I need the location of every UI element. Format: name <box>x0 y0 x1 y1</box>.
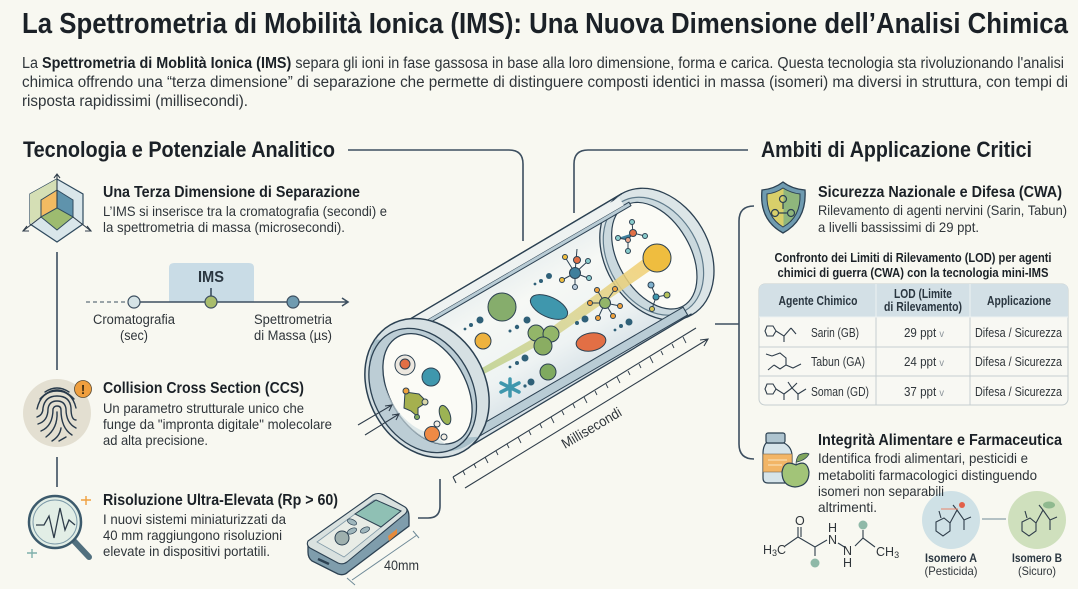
bracket connector <box>715 206 754 459</box>
dimension: 40mm <box>347 531 419 585</box>
text: risoluzione: I nuovi sistemi miniaturizzati da <box>103 511 286 527</box>
table header <box>778 287 1051 314</box>
chemical structure: N <box>843 544 852 558</box>
icon: magnifier <box>27 496 91 558</box>
chart: timescale: di Massa (µs) <box>254 328 332 343</box>
isomer A: Isomero A <box>925 551 977 565</box>
heading: tecnologia: Tecnologia e Potenziale Analitico <box>23 137 335 162</box>
chemical structure: H <box>763 543 772 557</box>
isomer A <box>922 491 980 578</box>
intro paragraph: chimica offrendo una “terza dimensione” di separazione che permette di distinguere composti identici in massa (isomeri) ma diversi in struttura, con tempi di <box>22 74 1068 91</box>
chemical structure: C <box>777 543 786 557</box>
icon: handheld device <box>307 494 409 575</box>
text: integrita: isomeri non separabili <box>818 483 944 499</box>
text: risoluzione: elevate in dispositivi portatili. <box>103 543 270 559</box>
row: soman: 37 ppt v <box>904 385 944 399</box>
text: sicurezza <box>818 184 1067 235</box>
isomer B: (Sicuro) <box>1018 564 1056 578</box>
table header: Applicazione <box>987 294 1051 308</box>
row: tabun: Difesa / Sicurezza <box>975 355 1062 369</box>
row: soman: Soman (GD) <box>811 385 869 399</box>
isomer A: (Pesticida) <box>924 564 978 578</box>
chemical structure: CH <box>876 545 894 559</box>
text: sicurezza: a livelli bassissimi di 29 ppt. <box>818 219 979 235</box>
row: tabun: 24 ppt v <box>904 355 944 369</box>
text: integrita: altrimenti. <box>818 499 877 515</box>
text: CCS <box>103 380 332 448</box>
chemical structure: H <box>843 556 852 570</box>
text: risoluzione <box>103 492 338 559</box>
text: CCS: Un parametro strutturale unico che <box>103 400 304 416</box>
row: soman: Difesa / Sicurezza <box>975 385 1062 399</box>
icon: fingerprint: ! <box>81 382 85 397</box>
text: integrita: Identifica frodi alimentari, pesticidi e <box>818 450 1028 466</box>
text: CCS: ad alta precisione. <box>103 432 208 448</box>
intro paragraph <box>22 55 1068 110</box>
text: terza dimensione: la spettrometria di massa (microsecondi). <box>103 219 345 235</box>
text: risoluzione: 40 mm raggiungono risoluzioni <box>103 527 282 543</box>
chart: timescale <box>86 263 348 343</box>
chemical structure <box>763 514 899 570</box>
small ball-and-stick molecules <box>560 220 670 320</box>
tube shell <box>400 168 738 445</box>
table title: Confronto dei Limiti di Rilevamento (LOD) per agenti <box>774 251 1052 265</box>
row: sarin: 29 ppt v <box>904 326 944 340</box>
chemical structure: 3 <box>894 550 899 560</box>
heading: ambiti: Ambiti di Applicazione Critici <box>761 137 1032 162</box>
icon: bottle and apple <box>763 433 809 487</box>
text: terza dimensione <box>103 184 387 235</box>
intro paragraph: risposta rapidissimi (millisecondi). <box>22 93 248 110</box>
text: integrita: metaboliti farmacologici distinguendo <box>818 467 1037 483</box>
row: sarin <box>765 326 1062 342</box>
table header: LOD (Limite <box>894 287 952 301</box>
chemical structure: O <box>795 514 805 528</box>
illustration: drift tube <box>340 168 738 480</box>
connector: device to tube <box>418 479 440 518</box>
panel: tecnologia items <box>23 174 387 559</box>
ions at entrance <box>395 355 453 442</box>
chart: timescale: IMS <box>198 269 224 286</box>
icon: fingerprint <box>23 379 92 447</box>
ruler label: Millisecondi <box>558 404 624 452</box>
chemical structure: 3 <box>772 548 777 558</box>
text: CCS: Collision Cross Section (CCS) <box>103 380 304 397</box>
dot trails <box>464 273 632 388</box>
isomer B: Isomero B <box>1012 551 1062 565</box>
text: CCS: funge da "impronta digitale" molecolare <box>103 416 332 432</box>
front ring <box>340 296 514 480</box>
table header: Agente Chimico <box>778 294 858 308</box>
snowflake molecule <box>501 379 519 396</box>
molecules inside tube <box>464 220 671 396</box>
chart: timescale: (sec) <box>120 328 148 343</box>
chemical structure: H <box>828 521 837 535</box>
isomer B <box>1008 491 1066 578</box>
row: tabun: Tabun (GA) <box>811 355 865 369</box>
panel: ambiti <box>715 182 1068 578</box>
dimension: 40mm: 40mm <box>384 558 419 573</box>
chemical structure: N <box>828 533 837 547</box>
row: tabun <box>766 353 1062 370</box>
table title: chimici di guerra (CWA) con la tecnologia mini-IMS <box>778 266 1048 280</box>
text: integrita <box>818 432 1062 515</box>
row: sarin: Difesa / Sicurezza <box>975 326 1062 340</box>
vertical dividers <box>56 252 58 487</box>
isomer link <box>982 518 1006 520</box>
ion beam <box>482 257 651 374</box>
chart: timescale: Spettrometria <box>254 312 332 327</box>
table: LOD <box>759 284 1068 405</box>
text: terza dimensione: L’IMS si inserisce tra la cromatografia (secondi) e <box>103 203 387 219</box>
arrows: ions entering <box>358 405 399 435</box>
table header: di Rilevamento) <box>884 300 962 314</box>
row: soman <box>765 382 1062 400</box>
table title <box>774 251 1052 280</box>
icon: shield <box>762 182 805 233</box>
row: sarin: Sarin (GB) <box>811 326 859 340</box>
text: risoluzione: Risoluzione Ultra-Elevata (Rp > 60) <box>103 492 338 509</box>
text: terza dimensione: Una Terza Dimensione di Separazione <box>103 184 360 201</box>
connector: ambiti to tube <box>574 150 748 213</box>
ruler <box>453 328 708 488</box>
icon: hexagon 3D <box>23 174 91 242</box>
connector: tecnologia to tube <box>348 150 523 241</box>
chart: timescale: Cromatografia <box>93 312 175 327</box>
